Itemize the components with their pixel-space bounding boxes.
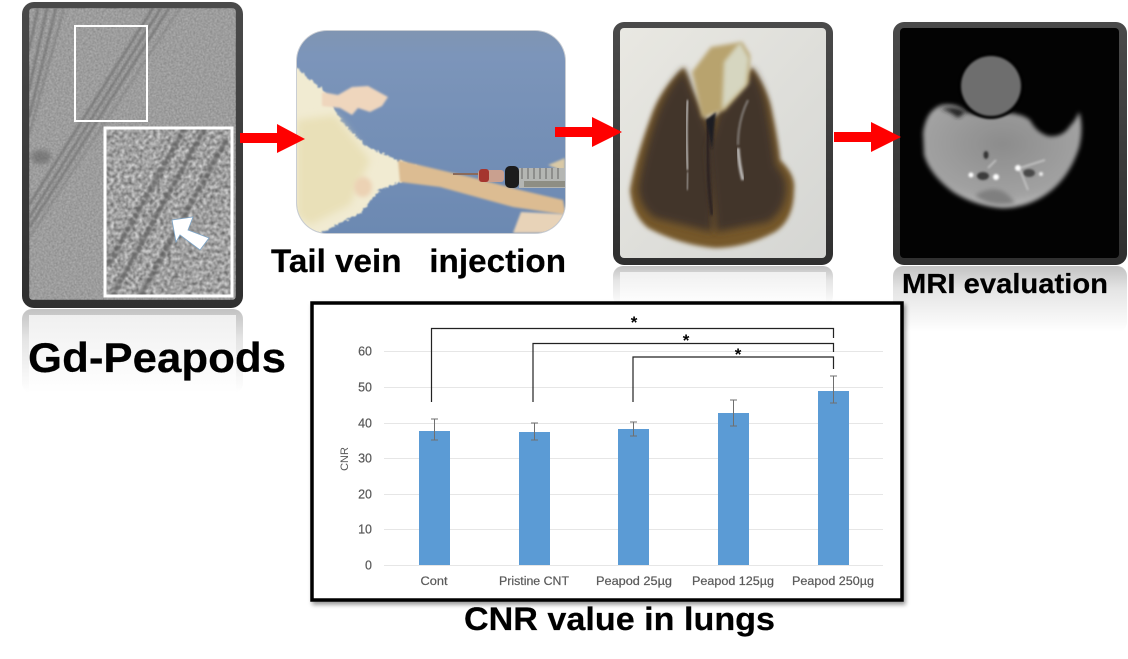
icon: white arrow pointing at nanotube <box>172 217 209 250</box>
x axis labels: Peapod 125µg <box>692 576 774 588</box>
reflection: Gd-Peapods panel <box>22 309 243 393</box>
x axis labels <box>420 576 874 588</box>
rat tail <box>398 160 566 215</box>
MRI reference phantom <box>968 109 1013 120</box>
error bars <box>431 376 837 440</box>
glove <box>513 212 565 233</box>
panel: CNR bar chart <box>312 303 902 600</box>
panel: excised lungs photo <box>613 22 833 265</box>
panel: MRI scan <box>893 22 1127 265</box>
x axis labels: Cont <box>420 576 448 588</box>
x axis labels: Peapod 250µg <box>792 576 874 588</box>
arrow: injection to lungs <box>555 117 622 147</box>
enlarged inset <box>105 128 232 296</box>
y axis tick labels: 60 <box>358 344 372 358</box>
arrow: lungs to MRI <box>834 122 901 152</box>
y axis tick labels: 30 <box>358 452 372 466</box>
y axis tick labels: 40 <box>358 416 372 430</box>
panel: Gd-Peapods TEM micrograph <box>22 2 243 308</box>
significance stars <box>631 313 742 364</box>
glossy highlights <box>686 100 688 170</box>
rat body <box>297 66 416 232</box>
lung outer brown rim <box>630 67 794 248</box>
MRI vessels <box>968 151 1045 190</box>
trachea tissue <box>692 42 750 118</box>
y axis tick labels: 0 <box>365 558 372 572</box>
significance stars: * <box>683 331 690 350</box>
small inset outline <box>75 26 147 121</box>
y axis tick labels: 20 <box>358 488 372 502</box>
right lung lobe <box>708 69 786 232</box>
y axis title: CNR <box>339 447 351 471</box>
y axis tick labels <box>358 344 372 572</box>
y axis tick labels: 10 <box>358 522 372 536</box>
heading: CNR value in lungs: CNR value in lungs <box>464 601 775 637</box>
bars <box>419 391 849 565</box>
MRI lung cross section <box>923 105 1082 208</box>
x axis labels: Peapod 25µg <box>596 576 672 588</box>
x axis labels: Pristine CNT <box>499 576 569 588</box>
rat arm and paw <box>322 86 388 115</box>
significance brackets <box>432 328 834 402</box>
heading: Gd-Peapods: Gd-Peapods <box>28 334 286 381</box>
y axis tick labels: 50 <box>358 380 372 394</box>
arrow: peapods to injection <box>240 124 305 153</box>
heading: Tail vein injection: Tail vein injection <box>271 243 566 279</box>
reflection: MRI panel <box>893 266 1127 332</box>
left lung lobe <box>638 69 718 232</box>
reflection: lung panel <box>613 266 833 306</box>
significance stars: * <box>735 345 742 364</box>
significance stars: * <box>631 313 638 332</box>
heading: MRI evaluation: MRI evaluation <box>902 268 1108 299</box>
syringe <box>453 166 565 188</box>
panel: tail vein injection photo <box>290 30 566 240</box>
